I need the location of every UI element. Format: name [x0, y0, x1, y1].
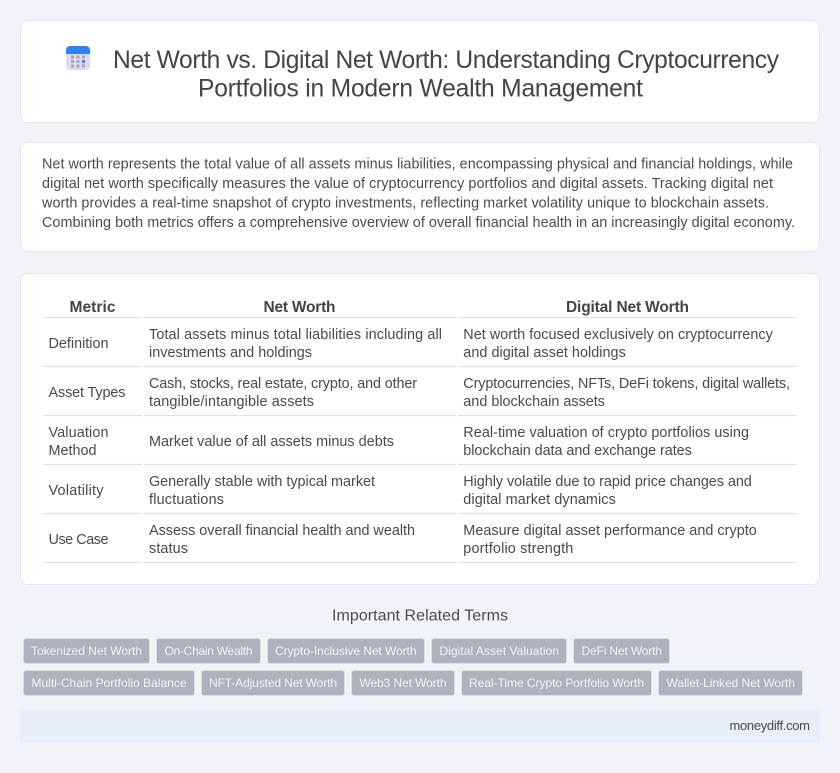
related term tags: Multi-Chain Portfolio Balance: [32, 676, 187, 690]
row: asset types: tangible/intangible assets: [149, 394, 314, 410]
table header: Metric: [70, 299, 116, 316]
related term tags: Crypto-Inclusive Net Worth: [275, 644, 416, 658]
row: valuation method: Method: [48, 443, 96, 459]
related term tags: Tokenized Net Worth: [31, 644, 142, 658]
row: volatility: fluctuations: [149, 492, 224, 508]
row: use case: portfolio strength: [463, 541, 573, 557]
panel: summary paragraph: worth provides a real-time snapshot of crypto investments, reflecting market volatility unique to blockchain assets.: [41, 196, 769, 212]
header panel: [20, 20, 820, 122]
table header: [70, 299, 689, 316]
row: valuation method: blockchain data and exchange rates: [463, 443, 692, 459]
row: use case: Measure digital asset performance and crypto: [463, 523, 757, 539]
row: definition: investments and holdings: [149, 345, 312, 361]
row: valuation method: Real-time valuation of crypto portfolios using: [463, 425, 749, 441]
row: valuation method: Market value of all assets minus debts: [149, 434, 394, 450]
panel: summary paragraph: Combining both metrics offers a comprehensive overview of overall financial health in an increasingly digital economy.: [42, 215, 795, 231]
row: definition: Net worth focused exclusively on cryptocurrency: [463, 327, 774, 343]
row: definition: Total assets minus total liabilities including all: [149, 327, 442, 343]
row: valuation method: Valuation: [48, 425, 108, 441]
related term tags: Digital Asset Valuation: [440, 644, 559, 658]
row: volatility: Volatility: [48, 483, 104, 499]
table header: Digital Net Worth: [566, 299, 689, 316]
row: use case: Use Case: [48, 532, 108, 548]
row: asset types: Asset Types: [48, 385, 126, 401]
title: Net Worth vs. Digital Net Worth: Understanding Cryptocurrency: [113, 47, 780, 74]
related term tags: [24, 638, 802, 696]
row: use case: Assess overall financial health and wealth: [149, 523, 415, 539]
footer: moneydiff.com: [730, 718, 810, 733]
related term tags: Real-Time Crypto Portfolio Worth: [469, 676, 644, 690]
row: definition: [48, 327, 774, 361]
row: use case: status: [149, 541, 188, 557]
row: asset types: Cryptocurrencies, NFTs, DeFi tokens, digital wallets,: [463, 376, 790, 392]
footer: [20, 710, 820, 743]
row: valuation method: [48, 425, 749, 459]
panel: summary paragraph: [20, 142, 820, 252]
title: Portfolios in Modern Wealth Management: [198, 76, 643, 102]
panel: comparison table: [20, 274, 820, 584]
row: use case: [48, 523, 757, 557]
heading: important related terms: Important Related Terms: [332, 608, 508, 624]
row: definition: Definition: [48, 336, 108, 352]
row: volatility: Generally stable with typical market: [149, 474, 375, 490]
row: asset types: and blockchain assets: [463, 394, 605, 410]
related term tags: DeFi Net Worth: [582, 644, 662, 658]
row: asset types: Cash, stocks, real estate, crypto, and other: [149, 376, 417, 392]
panel: summary paragraph: Net worth represents the total value of all assets minus liabilities, encompassing physical and financial holdings, while: [42, 156, 793, 172]
row: volatility: [48, 474, 752, 508]
related term tags: Wallet-Linked Net Worth: [666, 676, 795, 690]
row: volatility: digital market dynamics: [463, 492, 616, 508]
row: volatility: Highly volatile due to rapid price changes and: [463, 474, 752, 490]
panel: summary paragraph: digital net worth specifically measures the value of cryptocurrency portfolios and digital assets. Tracking digital net: [42, 176, 773, 192]
icon: calendar: [66, 46, 90, 70]
row: asset types: [48, 376, 790, 410]
title: [113, 47, 780, 102]
related term tags: NFT-Adjusted Net Worth: [209, 676, 337, 690]
related term tags: Web3 Net Worth: [360, 676, 446, 690]
table header: Net Worth: [264, 299, 336, 316]
row: definition: and digital asset holdings: [463, 345, 626, 361]
related term tags: On-Chain Wealth: [164, 644, 252, 658]
